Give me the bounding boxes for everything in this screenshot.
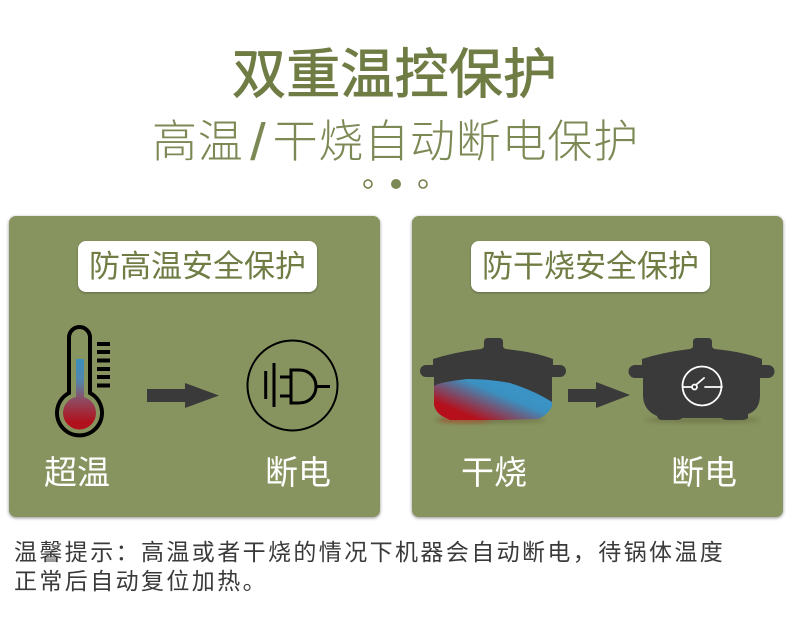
icon: pot with heat gradient <box>420 338 566 426</box>
arrow: overheat to power off <box>147 383 219 408</box>
tip text: 温馨提示：高温或者干烧的情况下机器会自动断电，待锅体温度 <box>14 539 725 565</box>
heading: dry-boil safety: 防干烧安全保护 <box>482 249 699 284</box>
icon: unplugged plug <box>246 340 338 432</box>
title: 双重温控保护 <box>232 45 557 105</box>
pagination dots <box>363 179 428 189</box>
arrow: dry boil to power off <box>568 382 630 408</box>
icon: pot with gauge <box>628 338 774 424</box>
tip text <box>14 539 725 594</box>
panel: dry-boil protection <box>412 216 783 517</box>
label: power off: 断电 <box>671 454 737 491</box>
heading: high temperature safety: 防高温安全保护 <box>89 249 306 284</box>
heading: high temperature safety <box>78 241 317 292</box>
heading: dry-boil safety <box>471 241 710 292</box>
subtitle: / <box>250 112 266 171</box>
panel: high temperature protection <box>9 216 380 517</box>
tip text: 正常后自动复位加热。 <box>14 568 268 594</box>
label: power off: 断电 <box>265 454 331 491</box>
label: dry boil: 干烧 <box>461 454 527 491</box>
label: over temperature: 超温 <box>44 454 110 491</box>
icon: thermometer <box>55 325 110 438</box>
subtitle: 高温 干烧自动断电保护 <box>152 116 639 167</box>
